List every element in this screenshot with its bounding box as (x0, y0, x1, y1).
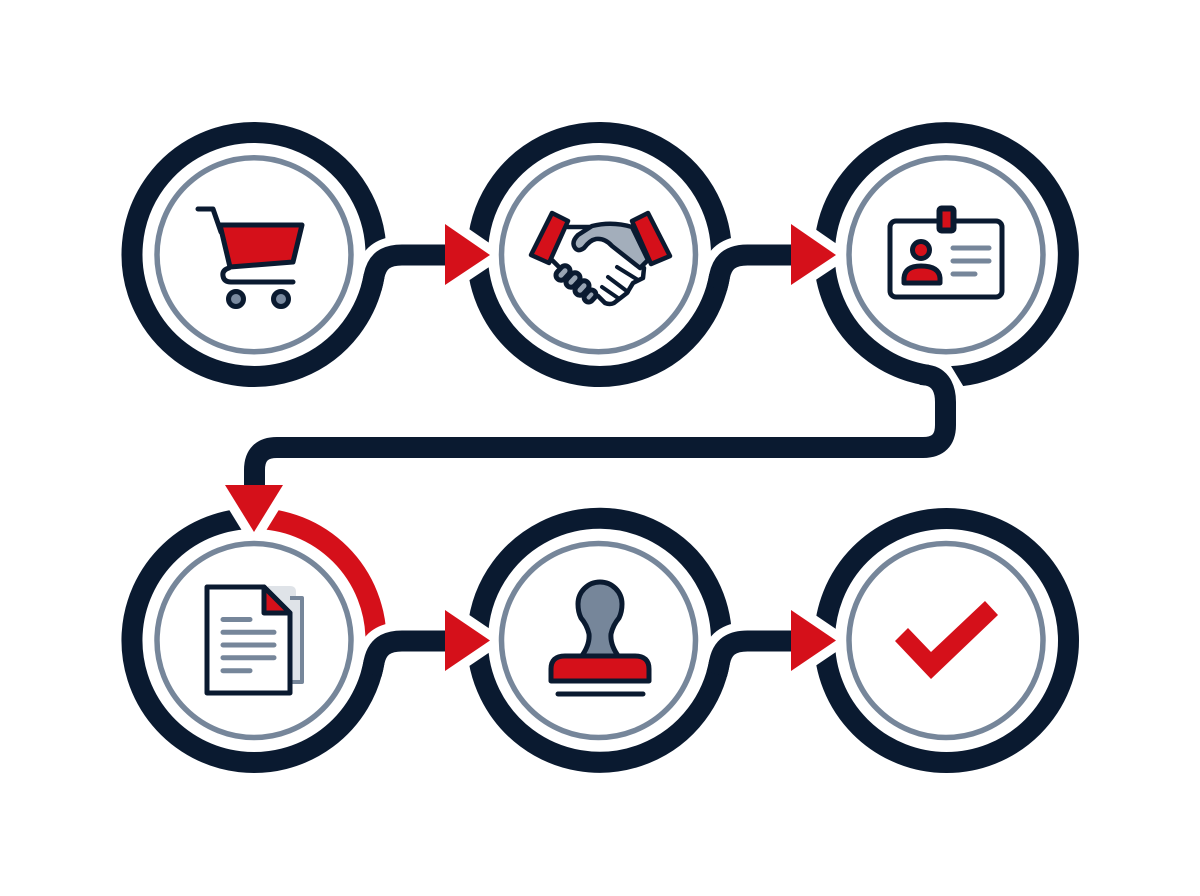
icon: rubber stamp (551, 582, 649, 694)
connector 5 to 6 (717, 610, 836, 674)
outer rings (132, 132, 1069, 762)
icon: shopping cart (198, 209, 302, 306)
icon: ID badge (890, 208, 1002, 297)
connector 1 to 2 (371, 224, 490, 288)
icon: documents (207, 586, 302, 693)
icon: check mark (895, 601, 998, 679)
red progress arc (254, 518, 376, 640)
inner gray rings (157, 158, 1043, 737)
connector 4 to 5 (371, 610, 490, 674)
connector 3 to 4 (225, 350, 965, 532)
icon: handshake (531, 213, 670, 304)
connector 2 to 3 (717, 224, 836, 288)
